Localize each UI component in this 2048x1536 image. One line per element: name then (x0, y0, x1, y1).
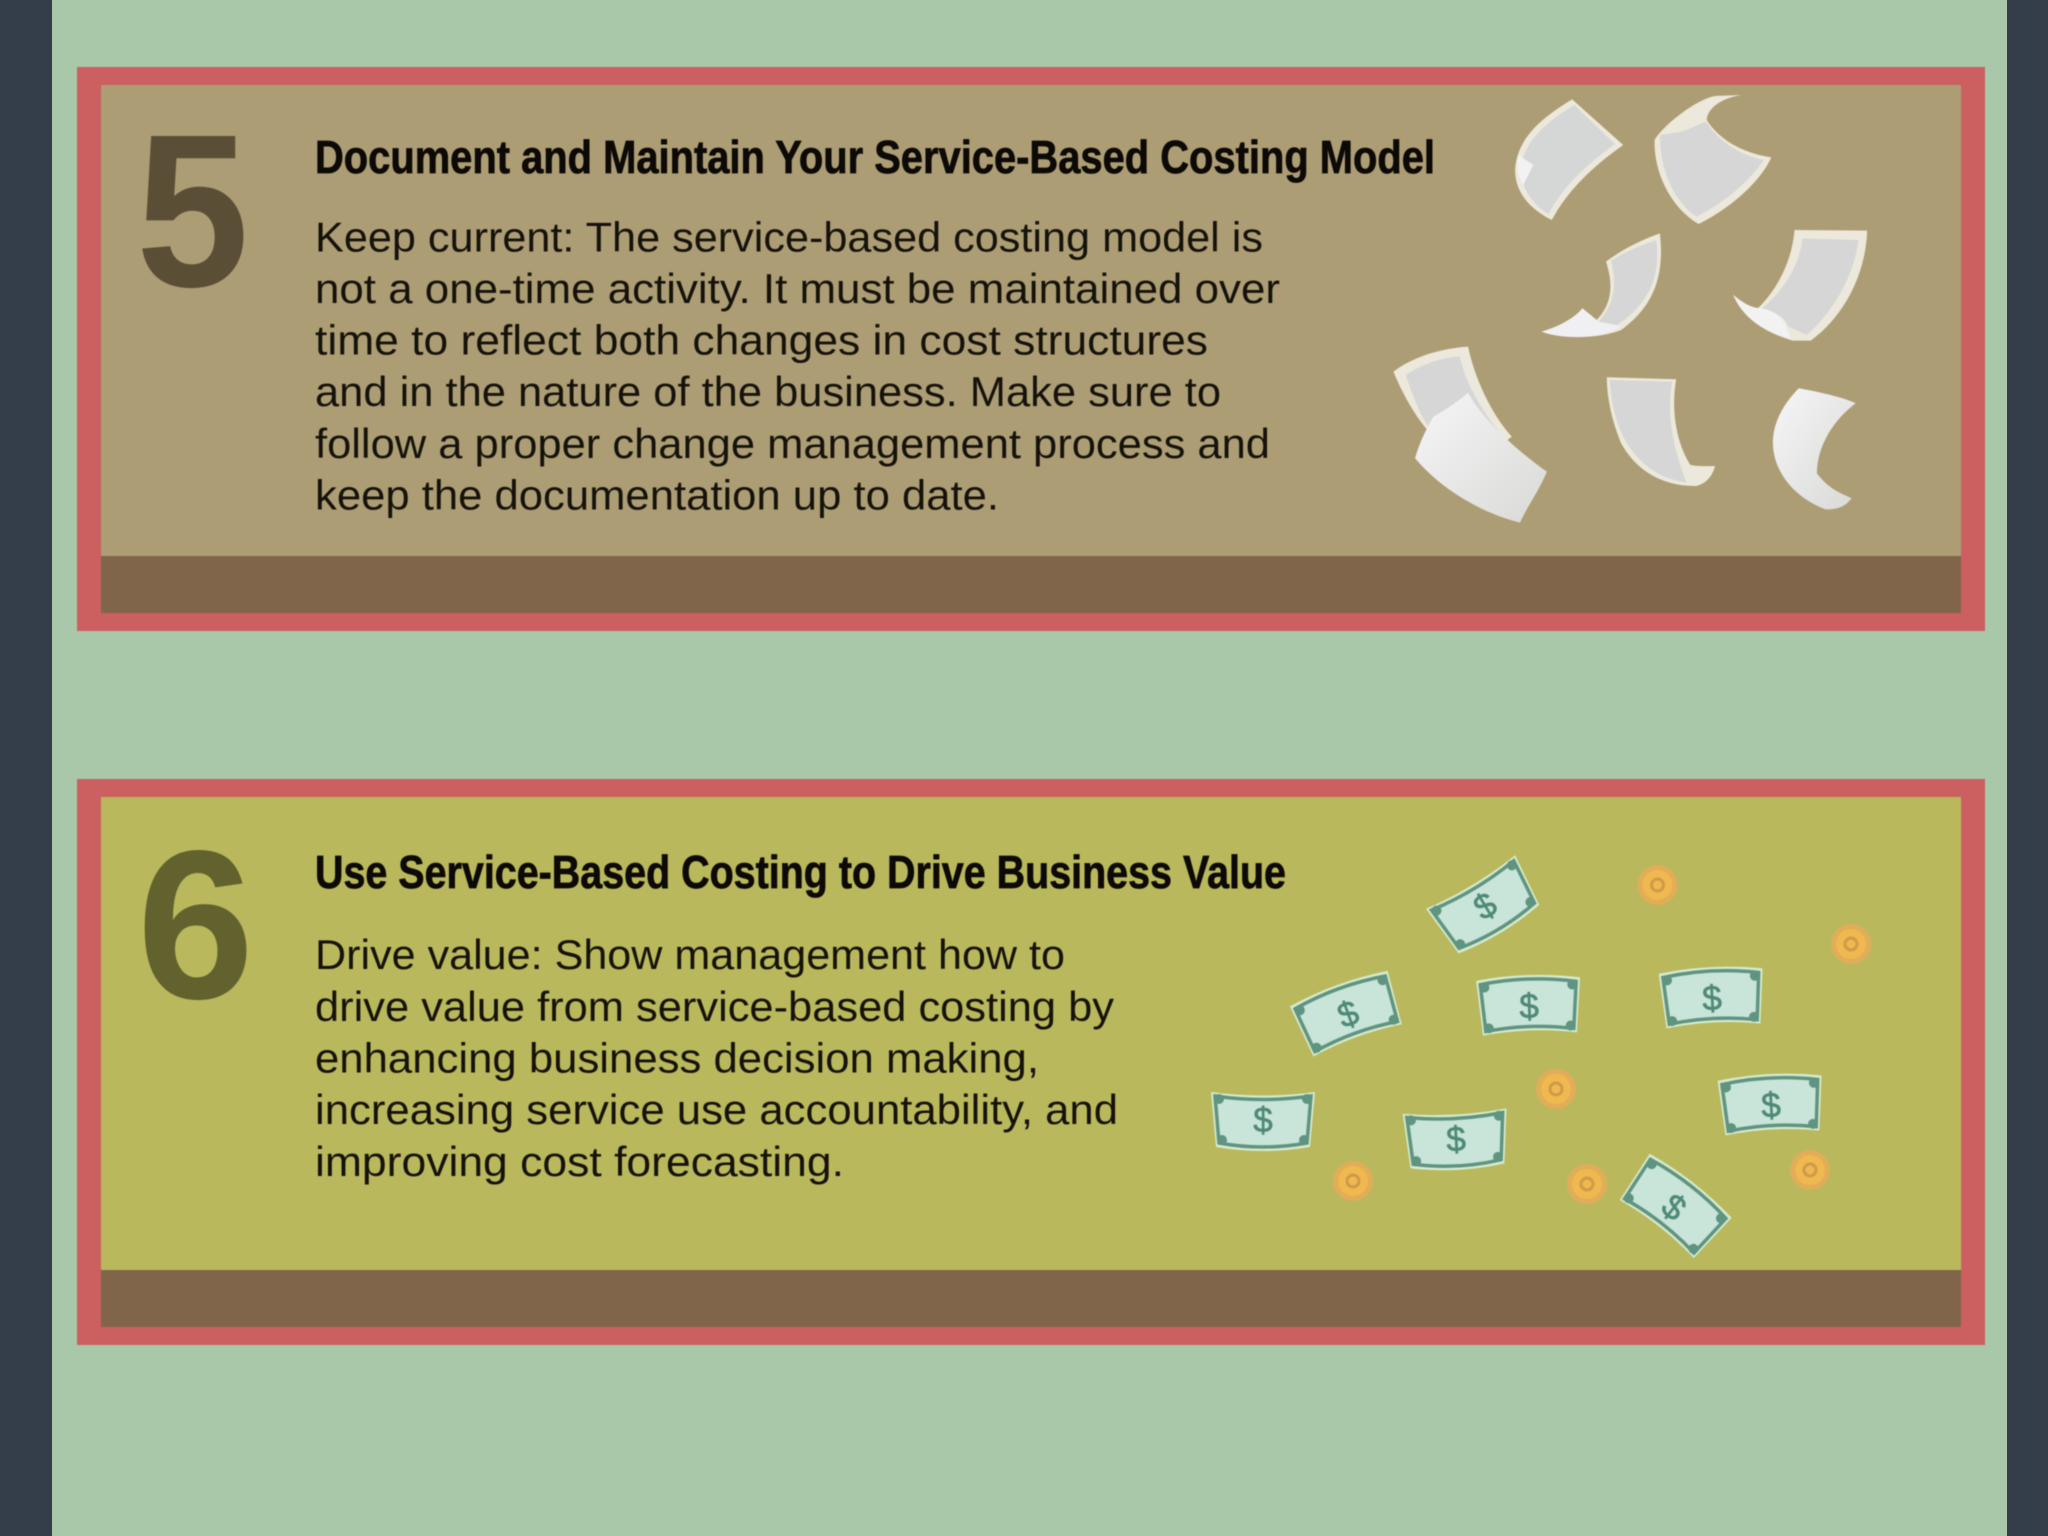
icon: flying dollar bills and coins: $ (1445, 1120, 1467, 1159)
right dark side band (2007, 0, 2048, 1536)
body text: step 5: and in the nature of the business. Make sure to (315, 368, 1221, 415)
icon: flying dollar bills and coins: $ (1760, 1086, 1782, 1125)
body text: step 5: keep the documentation up to date. (315, 472, 999, 518)
body text: step 6: drive value from service-based costing by (315, 983, 1114, 1030)
icon: flying dollar bills and coins (1211, 855, 1871, 1261)
number 6: 6 (137, 806, 254, 1043)
body text: step 6: improving cost forecasting. (315, 1138, 844, 1185)
body text: step 6: enhancing business decision making, (315, 1034, 1039, 1082)
left dark side band (0, 0, 52, 1536)
number 5: 5 (136, 90, 249, 333)
panel: step 6 (77, 779, 1985, 1345)
body text: step 6: increasing service use accountability, and (315, 1086, 1118, 1133)
body text: step 5: Keep current: The service-based costing model is (315, 214, 1263, 260)
body text: step 6: Drive value: Show management how to (315, 931, 1065, 978)
body text: step 5: not a one-time activity. It must be maintained over (315, 265, 1280, 312)
icon: flying dollar bills and coins: $ (1253, 1101, 1273, 1140)
icon: flying dollar bills and coins: $ (1332, 993, 1364, 1036)
icon: flying dollar bills and coins: $ (1519, 987, 1539, 1026)
body text: step 5: time to reflect both changes in cost structures (315, 316, 1208, 364)
icon: flying dollar bills and coins: $ (1701, 979, 1723, 1018)
heading: step 5: Document and Maintain Your Service-Based Costing Model (315, 131, 1435, 183)
body text: step 5: follow a proper change management process and (315, 420, 1270, 467)
body text: step 6 (315, 931, 1118, 1185)
icon: flying dollar bills and coins: $ (1654, 1186, 1693, 1229)
icon: flying paper sheets (1393, 95, 1867, 523)
icon: flying dollar bills and coins: $ (1467, 885, 1504, 928)
panel: step 5 (77, 67, 1985, 631)
heading: step 6: Use Service-Based Costing to Drive Business Value (315, 846, 1286, 898)
body text: step 5 (315, 214, 1280, 518)
